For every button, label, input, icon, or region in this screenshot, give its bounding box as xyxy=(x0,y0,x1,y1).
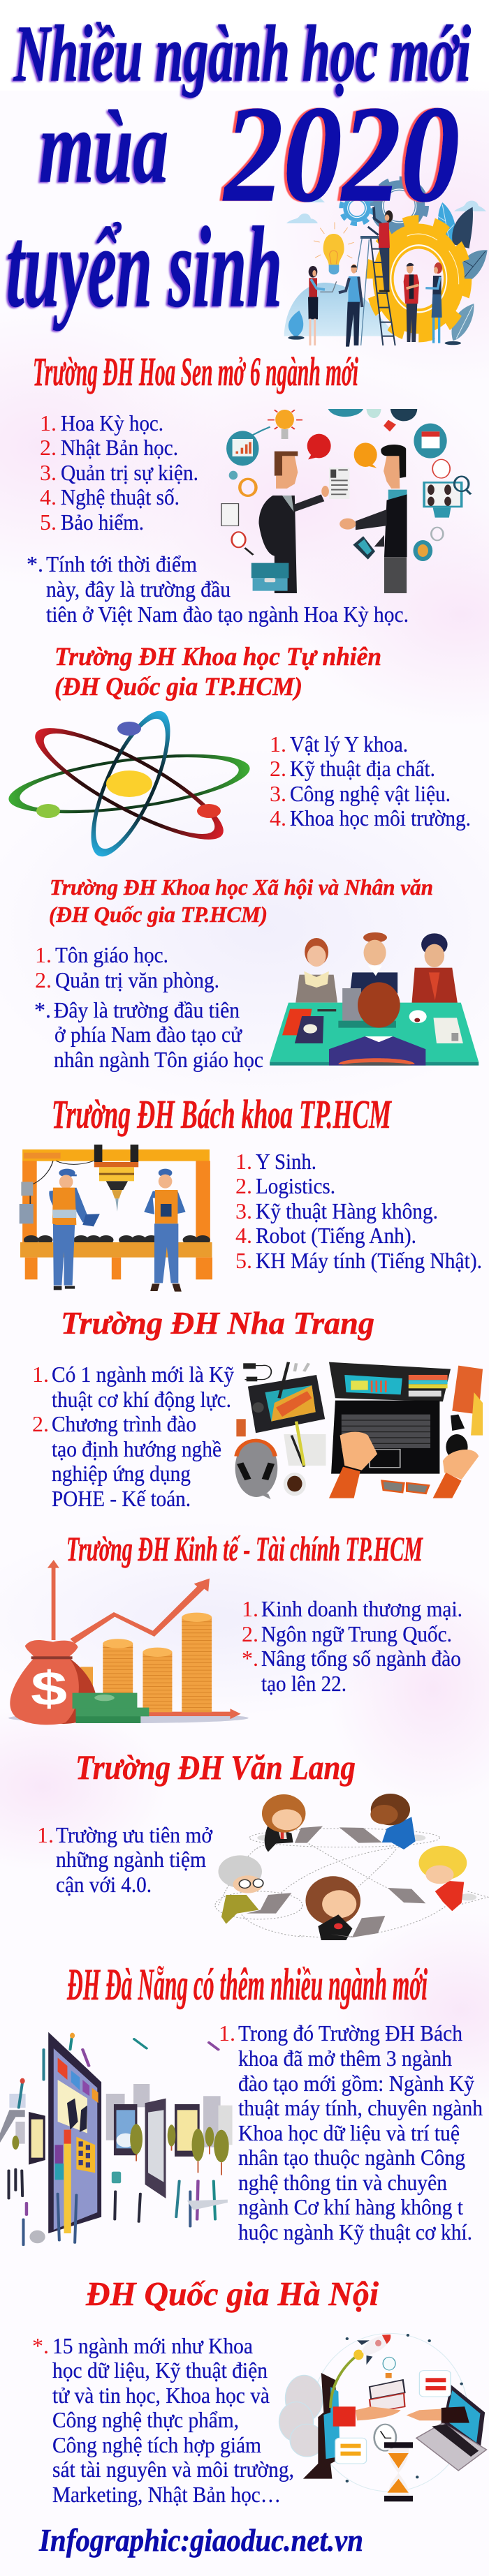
title block xyxy=(6,9,471,331)
note: *. xyxy=(34,997,51,1022)
note: này, đây là trường đầu xyxy=(46,576,231,602)
list of majors: Tôn giáo học. xyxy=(55,942,168,967)
panel: Văn Lang xyxy=(37,1748,488,1940)
title line 3: tuyển sinh xyxy=(6,203,282,331)
note: nhân ngành Tôn giáo học xyxy=(54,1047,263,1072)
list of majors xyxy=(270,731,471,831)
footer credit: Infographic:giaoduc.net.vn xyxy=(38,2523,363,2558)
panel: Hoa Sen xyxy=(27,349,471,627)
icon: atom xyxy=(6,701,253,866)
list of majors: 2. xyxy=(270,756,286,781)
heading xyxy=(54,643,381,701)
list of majors: Nâng tổng số ngành đào xyxy=(261,1646,461,1671)
list: tử và tin học, Khoa học và xyxy=(52,2383,270,2408)
list of majors: 2. xyxy=(242,1621,258,1646)
list: Công nghệ thực phẩm, xyxy=(52,2407,239,2432)
panel: Bách khoa xyxy=(20,1092,482,1292)
list: nhân tạo thuộc ngành Công xyxy=(238,2145,465,2170)
list: nghệ thông tin và chuyên xyxy=(238,2170,447,2195)
list: Trường ưu tiên mở xyxy=(56,1822,213,1847)
list of majors: *. xyxy=(242,1646,258,1671)
note: tiên ở Việt Nam đào tạo ngành Hoa Kỳ học. xyxy=(46,602,409,627)
heading: ĐH Quốc gia Hà Nội xyxy=(85,2275,379,2313)
list of majors: 5. xyxy=(235,1248,252,1273)
list of majors: Vật lý Y khoa. xyxy=(290,731,408,757)
list of majors: Y Sinh. xyxy=(256,1149,316,1174)
panel: Đà Nẵng xyxy=(0,1960,483,2245)
list of majors: Kỹ thuật địa chất. xyxy=(290,756,435,781)
illustration: factory workers xyxy=(20,1145,212,1292)
list of majors: 2. xyxy=(235,1173,252,1198)
list of majors: 3. xyxy=(40,460,57,485)
list of majors: Nghệ thuật số. xyxy=(61,484,180,509)
list: 1. xyxy=(37,1822,54,1847)
list of majors: 3. xyxy=(270,781,286,806)
heading xyxy=(49,874,433,927)
note: ở phía Nam đào tạo cử xyxy=(54,1022,243,1047)
list of majors xyxy=(40,410,198,535)
list of majors xyxy=(242,1596,462,1696)
list: khoa đã mở thêm 3 ngành xyxy=(238,2046,452,2071)
heading: Trường ĐH Khoa học Xã hội và Nhân văn xyxy=(50,874,433,900)
list of majors: 1. xyxy=(40,410,57,435)
list: huộc ngành Kỹ thuật cơ khí. xyxy=(238,2219,472,2244)
list of majors: 3. xyxy=(235,1198,252,1223)
list of majors: tạo lên 22. xyxy=(261,1671,346,1696)
list of majors: Logistics. xyxy=(256,1173,335,1198)
list of majors: 4. xyxy=(270,805,286,831)
list of majors: Công nghệ vật liệu. xyxy=(290,781,451,806)
note: Tính tới thời điểm xyxy=(46,551,197,576)
list of majors: Có 1 ngành mới là Kỹ xyxy=(52,1362,234,1387)
list of majors: Robot (Tiếng Anh). xyxy=(256,1223,416,1248)
list: Marketing, Nhật Bản học… xyxy=(52,2482,281,2507)
list of majors: 2. xyxy=(35,967,52,992)
heading: (ĐH Quốc gia TP.HCM) xyxy=(54,673,302,701)
list of majors: 2. xyxy=(32,1411,49,1436)
list of majors xyxy=(35,942,219,992)
list of majors: tạo định hướng nghề xyxy=(52,1436,221,1461)
list xyxy=(37,1822,213,1897)
panel: Kinh tế - Tài chính xyxy=(8,1529,462,1725)
list: Công nghệ tích hợp giám xyxy=(52,2432,261,2457)
list of majors: Bảo hiểm. xyxy=(61,509,144,535)
note: Đây là trường đầu tiên xyxy=(54,997,240,1022)
list of majors: 5. xyxy=(40,509,57,535)
list: những ngành tiệm xyxy=(56,1847,206,1872)
list of majors xyxy=(235,1149,482,1273)
list: học dữ liệu, Kỹ thuật điện xyxy=(52,2358,268,2383)
title line 2: mùa xyxy=(39,90,168,204)
list: đào tạo mới gồm: Ngành Kỹ xyxy=(238,2071,474,2096)
list of majors: POHE - Kế toán. xyxy=(52,1486,191,1511)
list: ngành Cơ khí hàng không t xyxy=(238,2194,463,2219)
note xyxy=(34,997,263,1072)
heading: Trường ĐH Khoa học Tự nhiên xyxy=(54,643,381,671)
panel: Nha Trang xyxy=(32,1305,483,1511)
list: sát tài nguyên và môi trường, xyxy=(52,2457,294,2482)
list xyxy=(32,2333,294,2507)
note: *. xyxy=(27,551,43,576)
illustration: interview meeting xyxy=(270,932,479,1066)
list of majors: Quản trị văn phòng. xyxy=(55,967,219,992)
list of majors: Kỹ thuật Hàng không. xyxy=(256,1198,438,1223)
panel: ĐH Quốc gia Hà Nội xyxy=(32,2275,486,2507)
illustration: two businessmen with icons xyxy=(221,409,471,593)
chart: money bag and coin stacks xyxy=(8,1560,249,1725)
list of majors: nghiệp ứng dụng xyxy=(52,1461,191,1486)
note xyxy=(27,551,409,627)
list of majors: 4. xyxy=(40,484,57,509)
illustration: online knowledge exchange xyxy=(279,2333,486,2501)
list of majors: Nhật Bản học. xyxy=(61,435,178,460)
heading: (ĐH Quốc gia TP.HCM) xyxy=(49,902,268,927)
list of majors: thuật cơ khí động lực. xyxy=(52,1387,231,1412)
heading: Trường ĐH Văn Lang xyxy=(75,1748,356,1787)
list of majors: 1. xyxy=(242,1596,258,1621)
list of majors: 1. xyxy=(35,942,52,967)
chart: money bag and coin stacks: $ xyxy=(31,1661,67,1716)
list: Trong đó Trường ĐH Bách xyxy=(238,2020,462,2046)
list of majors: 2. xyxy=(40,435,57,460)
list of majors: Khoa học môi trường. xyxy=(290,805,471,831)
list of majors: 1. xyxy=(32,1362,49,1387)
list: 1. xyxy=(219,2020,235,2046)
panel: Khoa học Tự nhiên xyxy=(6,643,471,866)
list of majors: 4. xyxy=(235,1223,252,1248)
list of majors: Hoa Kỳ học. xyxy=(61,410,163,435)
list of majors: Ngôn ngữ Trung Quốc. xyxy=(261,1621,452,1646)
list: *. xyxy=(32,2333,49,2358)
illustration: digital city with tablet xyxy=(0,2032,233,2245)
heading: Trường ĐH Nha Trang xyxy=(61,1305,374,1341)
illustration: teamwork with gears xyxy=(284,179,488,347)
illustration: designer desk xyxy=(235,1362,483,1499)
list of majors: 1. xyxy=(235,1149,252,1174)
list of majors: 1. xyxy=(270,731,286,757)
list: 15 ngành mới như Khoa xyxy=(52,2333,253,2358)
list xyxy=(219,2020,483,2244)
panel: Khoa học Xã hội và Nhân văn xyxy=(34,874,479,1072)
list of majors: Quản trị sự kiện. xyxy=(61,460,198,485)
list of majors xyxy=(32,1362,234,1511)
list: Khoa học dữ liệu và trí tuệ xyxy=(238,2120,460,2145)
list: cận với 4.0. xyxy=(56,1872,152,1897)
list of majors: Kinh doanh thương mại. xyxy=(261,1596,462,1621)
icon: large yellow gear xyxy=(370,220,467,337)
illustration: people on laptops network xyxy=(215,1794,488,1940)
list of majors: Chương trình đào xyxy=(52,1411,196,1436)
